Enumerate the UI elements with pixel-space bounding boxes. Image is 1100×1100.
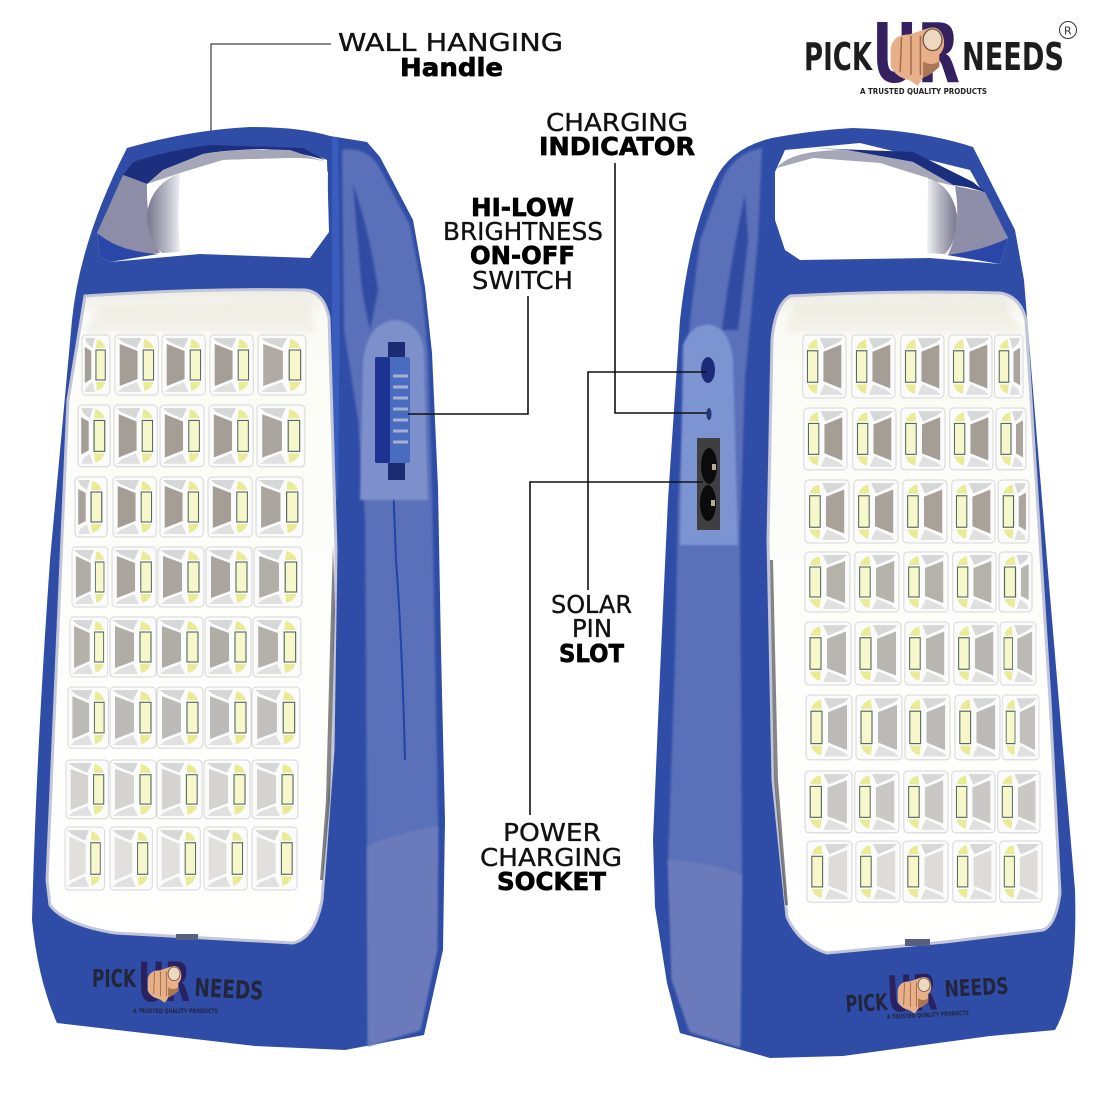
left lantern logo <box>92 951 264 1015</box>
left handle inner wall <box>147 173 181 253</box>
right side upper streak <box>722 195 748 330</box>
left handle grey band <box>147 150 326 184</box>
right lantern logo: UR <box>886 963 939 1024</box>
label: solar pin slot: SLOT <box>559 639 624 668</box>
brand logo: A TRUSTED QUALITY PRODUCTS <box>860 87 987 96</box>
leader: wall hanging handle <box>211 44 331 147</box>
right lantern logo <box>845 963 1009 1024</box>
brand logo <box>804 7 1076 102</box>
right lantern logo: NEEDS <box>944 974 1009 1003</box>
left handle far wall <box>97 175 160 258</box>
label: wall hanging handle <box>338 28 563 82</box>
right handle blue lip <box>947 238 1008 264</box>
left LED grid: 8 rows by 5 columns <box>65 335 306 890</box>
label: hi-low brightness on-off switch: ON-OFF <box>470 241 575 270</box>
left lens <box>47 290 336 943</box>
right handle navy interior <box>813 148 985 192</box>
right handle far wall <box>948 186 1008 255</box>
label: charging indicator: CHARGING <box>546 108 688 137</box>
right lantern logo: PICK <box>845 990 889 1018</box>
right lens dark reflection <box>770 560 788 905</box>
right side lower highlight <box>668 860 742 1047</box>
left lantern body <box>32 127 445 1050</box>
left handle navy interior <box>123 145 325 184</box>
right lantern body <box>653 128 1075 1058</box>
right lantern logo: A TRUSTED QUALITY PRODUCTS <box>887 1010 969 1021</box>
label: hi-low brightness on-off switch: HI-LOW <box>471 193 574 222</box>
right handle grey band <box>777 150 955 186</box>
charging indicator hole <box>706 408 712 420</box>
right lens top band <box>785 303 1022 332</box>
power charging socket <box>697 438 720 530</box>
label: power charging socket: POWER <box>503 818 601 847</box>
label: solar pin slot <box>551 590 632 668</box>
label: hi-low brightness on-off switch <box>443 193 603 295</box>
right handle inner wall <box>927 178 957 254</box>
label: wall hanging handle: WALL HANGING <box>338 28 563 57</box>
left lens dark reflection <box>320 545 335 880</box>
label: hi-low brightness on-off switch: SWITCH <box>472 266 573 295</box>
left side edge shadow strip <box>332 137 340 500</box>
left bottom clip <box>176 934 198 940</box>
right bottom clip <box>905 939 930 946</box>
left side light panel <box>342 149 438 1046</box>
left lens top band <box>85 302 315 332</box>
left lantern logo: PICK <box>92 964 137 993</box>
leader: charging indicator <box>615 163 707 413</box>
left side lower highlight <box>367 826 438 1046</box>
brand logo: R <box>1064 24 1072 38</box>
brand logo: UR <box>872 7 960 102</box>
left lantern slide switch <box>360 320 428 500</box>
right handle white opening <box>777 158 928 253</box>
leader: switch <box>408 296 528 414</box>
left inner groove line <box>393 480 405 760</box>
left handle white opening <box>178 158 328 252</box>
label: charging indicator: INDICATOR <box>539 132 695 161</box>
label: power charging socket: CHARGING <box>480 843 622 872</box>
right LED grid: 8 rows by 5 columns <box>803 335 1042 902</box>
label: solar pin slot: SOLAR <box>551 590 632 619</box>
label: charging indicator <box>539 108 695 161</box>
left lantern logo: A TRUSTED QUALITY PRODUCTS <box>133 1007 218 1015</box>
leader: power socket <box>530 482 703 815</box>
leader: solar pin slot <box>588 372 706 590</box>
right side light panel <box>668 148 762 1047</box>
lantern: left front view <box>32 127 445 1050</box>
label: solar pin slot: PIN <box>572 614 612 643</box>
right port recess <box>680 325 738 545</box>
left side upper streak <box>353 185 378 330</box>
solar pin slot <box>701 357 715 383</box>
left lantern logo: UR <box>138 951 190 1014</box>
label: hi-low brightness on-off switch: BRIGHTNESS <box>443 217 603 246</box>
left handle blue lip <box>97 233 158 262</box>
lantern: right port-side view <box>653 128 1075 1058</box>
label: power charging socket <box>480 818 622 896</box>
brand logo: PICK <box>804 35 873 79</box>
label: power charging socket: SOCKET <box>497 867 606 896</box>
label: wall hanging handle: Handle <box>400 53 503 82</box>
left lantern logo: NEEDS <box>194 973 264 1006</box>
right lens <box>768 292 1060 953</box>
